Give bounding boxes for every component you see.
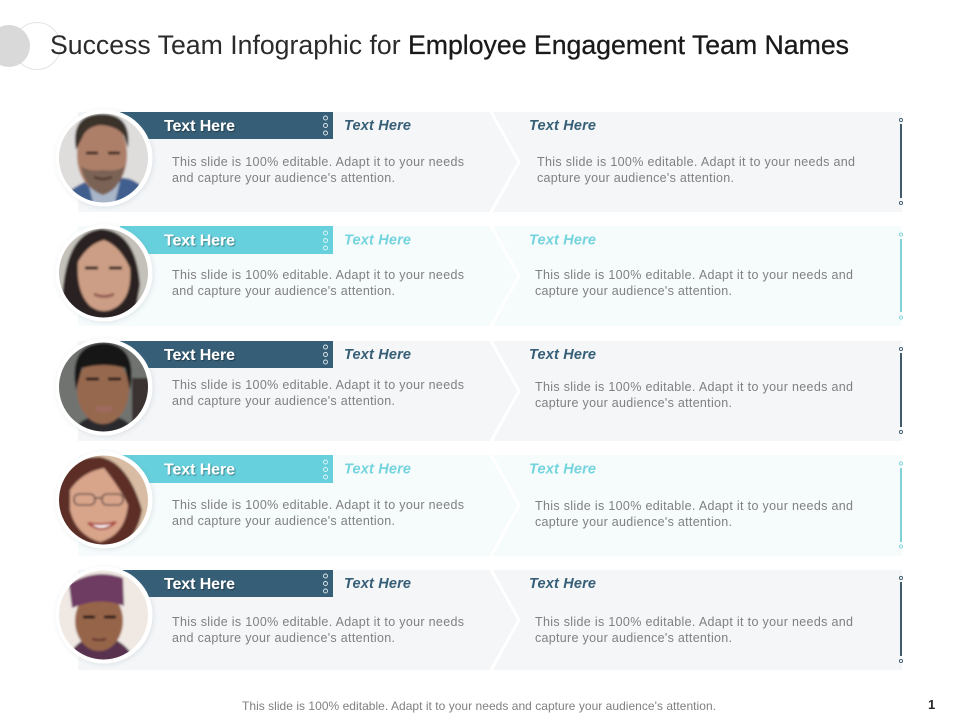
body left: This slide is 100% editable. Adapt it to your needs	[172, 615, 464, 629]
header bar	[120, 112, 333, 139]
subheading right: Text Here	[529, 118, 596, 134]
body right: This slide is 100% editable. Adapt it to your needs and	[535, 268, 853, 282]
body left: and capture your audience's attention.	[172, 171, 395, 185]
panel	[78, 341, 902, 441]
subheading left: Text Here	[344, 232, 411, 248]
heading: Text Here	[164, 576, 235, 593]
body right: capture your audience's attention.	[535, 515, 732, 529]
chevron divider	[490, 224, 519, 328]
body left: This slide is 100% editable. Adapt it to your needs	[172, 378, 464, 392]
heading: Text Here	[164, 232, 235, 250]
right rule	[899, 233, 903, 319]
body left: This slide is 100% editable. Adapt it to your needs	[172, 268, 464, 282]
header bar	[120, 570, 333, 597]
panel	[78, 455, 902, 556]
panel	[78, 570, 902, 670]
body right: capture your audience's attention.	[535, 631, 732, 645]
right rule	[899, 462, 903, 548]
row 2	[56, 224, 903, 328]
footer note: This slide is 100% editable. Adapt it to your needs and capture your audience's attention.	[242, 699, 716, 713]
decorative header circles	[0, 22, 60, 70]
chevron divider	[490, 339, 519, 443]
portrait: woman with dark hair	[56, 224, 152, 322]
header bar	[120, 455, 333, 483]
body right: This slide is 100% editable. Adapt it to your needs and	[535, 615, 853, 629]
row 5	[56, 566, 903, 672]
body left: and capture your audience's attention.	[172, 514, 395, 528]
portrait: woman with glasses	[56, 452, 152, 548]
bar dots	[324, 231, 328, 250]
body right: This slide is 100% editable. Adapt it to your needs and	[537, 155, 855, 169]
heading: Text Here	[164, 347, 235, 364]
subheading right: Text Here	[529, 232, 596, 248]
body right: capture your audience's attention.	[535, 284, 732, 298]
portrait: man with short dark hair	[56, 338, 152, 436]
bar dots	[324, 574, 328, 593]
row 3	[56, 338, 903, 443]
bar dots	[324, 116, 328, 135]
row 1	[56, 110, 903, 214]
panel	[78, 112, 902, 212]
body left: This slide is 100% editable. Adapt it to your needs	[172, 498, 464, 512]
chevron divider	[490, 453, 519, 558]
panel	[78, 226, 902, 326]
subheading right: Text Here	[529, 576, 596, 592]
row 4	[56, 452, 903, 558]
portrait: man with stubble	[56, 110, 152, 206]
page number: 1	[928, 697, 935, 712]
subheading left: Text Here	[344, 118, 411, 134]
subheading right: Text Here	[529, 347, 596, 363]
body left: and capture your audience's attention.	[172, 284, 395, 298]
body right: This slide is 100% editable. Adapt it to your needs and	[535, 380, 853, 394]
body right: capture your audience's attention.	[535, 396, 732, 410]
heading: Text Here	[164, 118, 235, 135]
subheading left: Text Here	[344, 462, 411, 478]
title: Success Team Infographic for Employee Engagement Team Names	[50, 30, 849, 60]
body left: This slide is 100% editable. Adapt it to your needs	[172, 155, 464, 169]
bar dots	[324, 345, 328, 364]
header bar	[120, 341, 333, 368]
right rule	[899, 118, 903, 205]
header bar	[120, 226, 333, 254]
portrait: young man with purple cap	[56, 566, 152, 664]
subheading left: Text Here	[344, 576, 411, 592]
body right: This slide is 100% editable. Adapt it to your needs and	[535, 499, 853, 513]
right rule	[899, 347, 903, 434]
body left: and capture your audience's attention.	[172, 394, 395, 408]
subheading right: Text Here	[529, 462, 596, 478]
right rule	[899, 576, 903, 663]
body right: capture your audience's attention.	[537, 171, 734, 185]
body left: and capture your audience's attention.	[172, 631, 395, 645]
bar dots	[324, 460, 328, 479]
heading: Text Here	[164, 462, 235, 478]
subheading left: Text Here	[344, 347, 411, 363]
chevron divider	[490, 110, 519, 214]
chevron divider	[490, 568, 519, 672]
